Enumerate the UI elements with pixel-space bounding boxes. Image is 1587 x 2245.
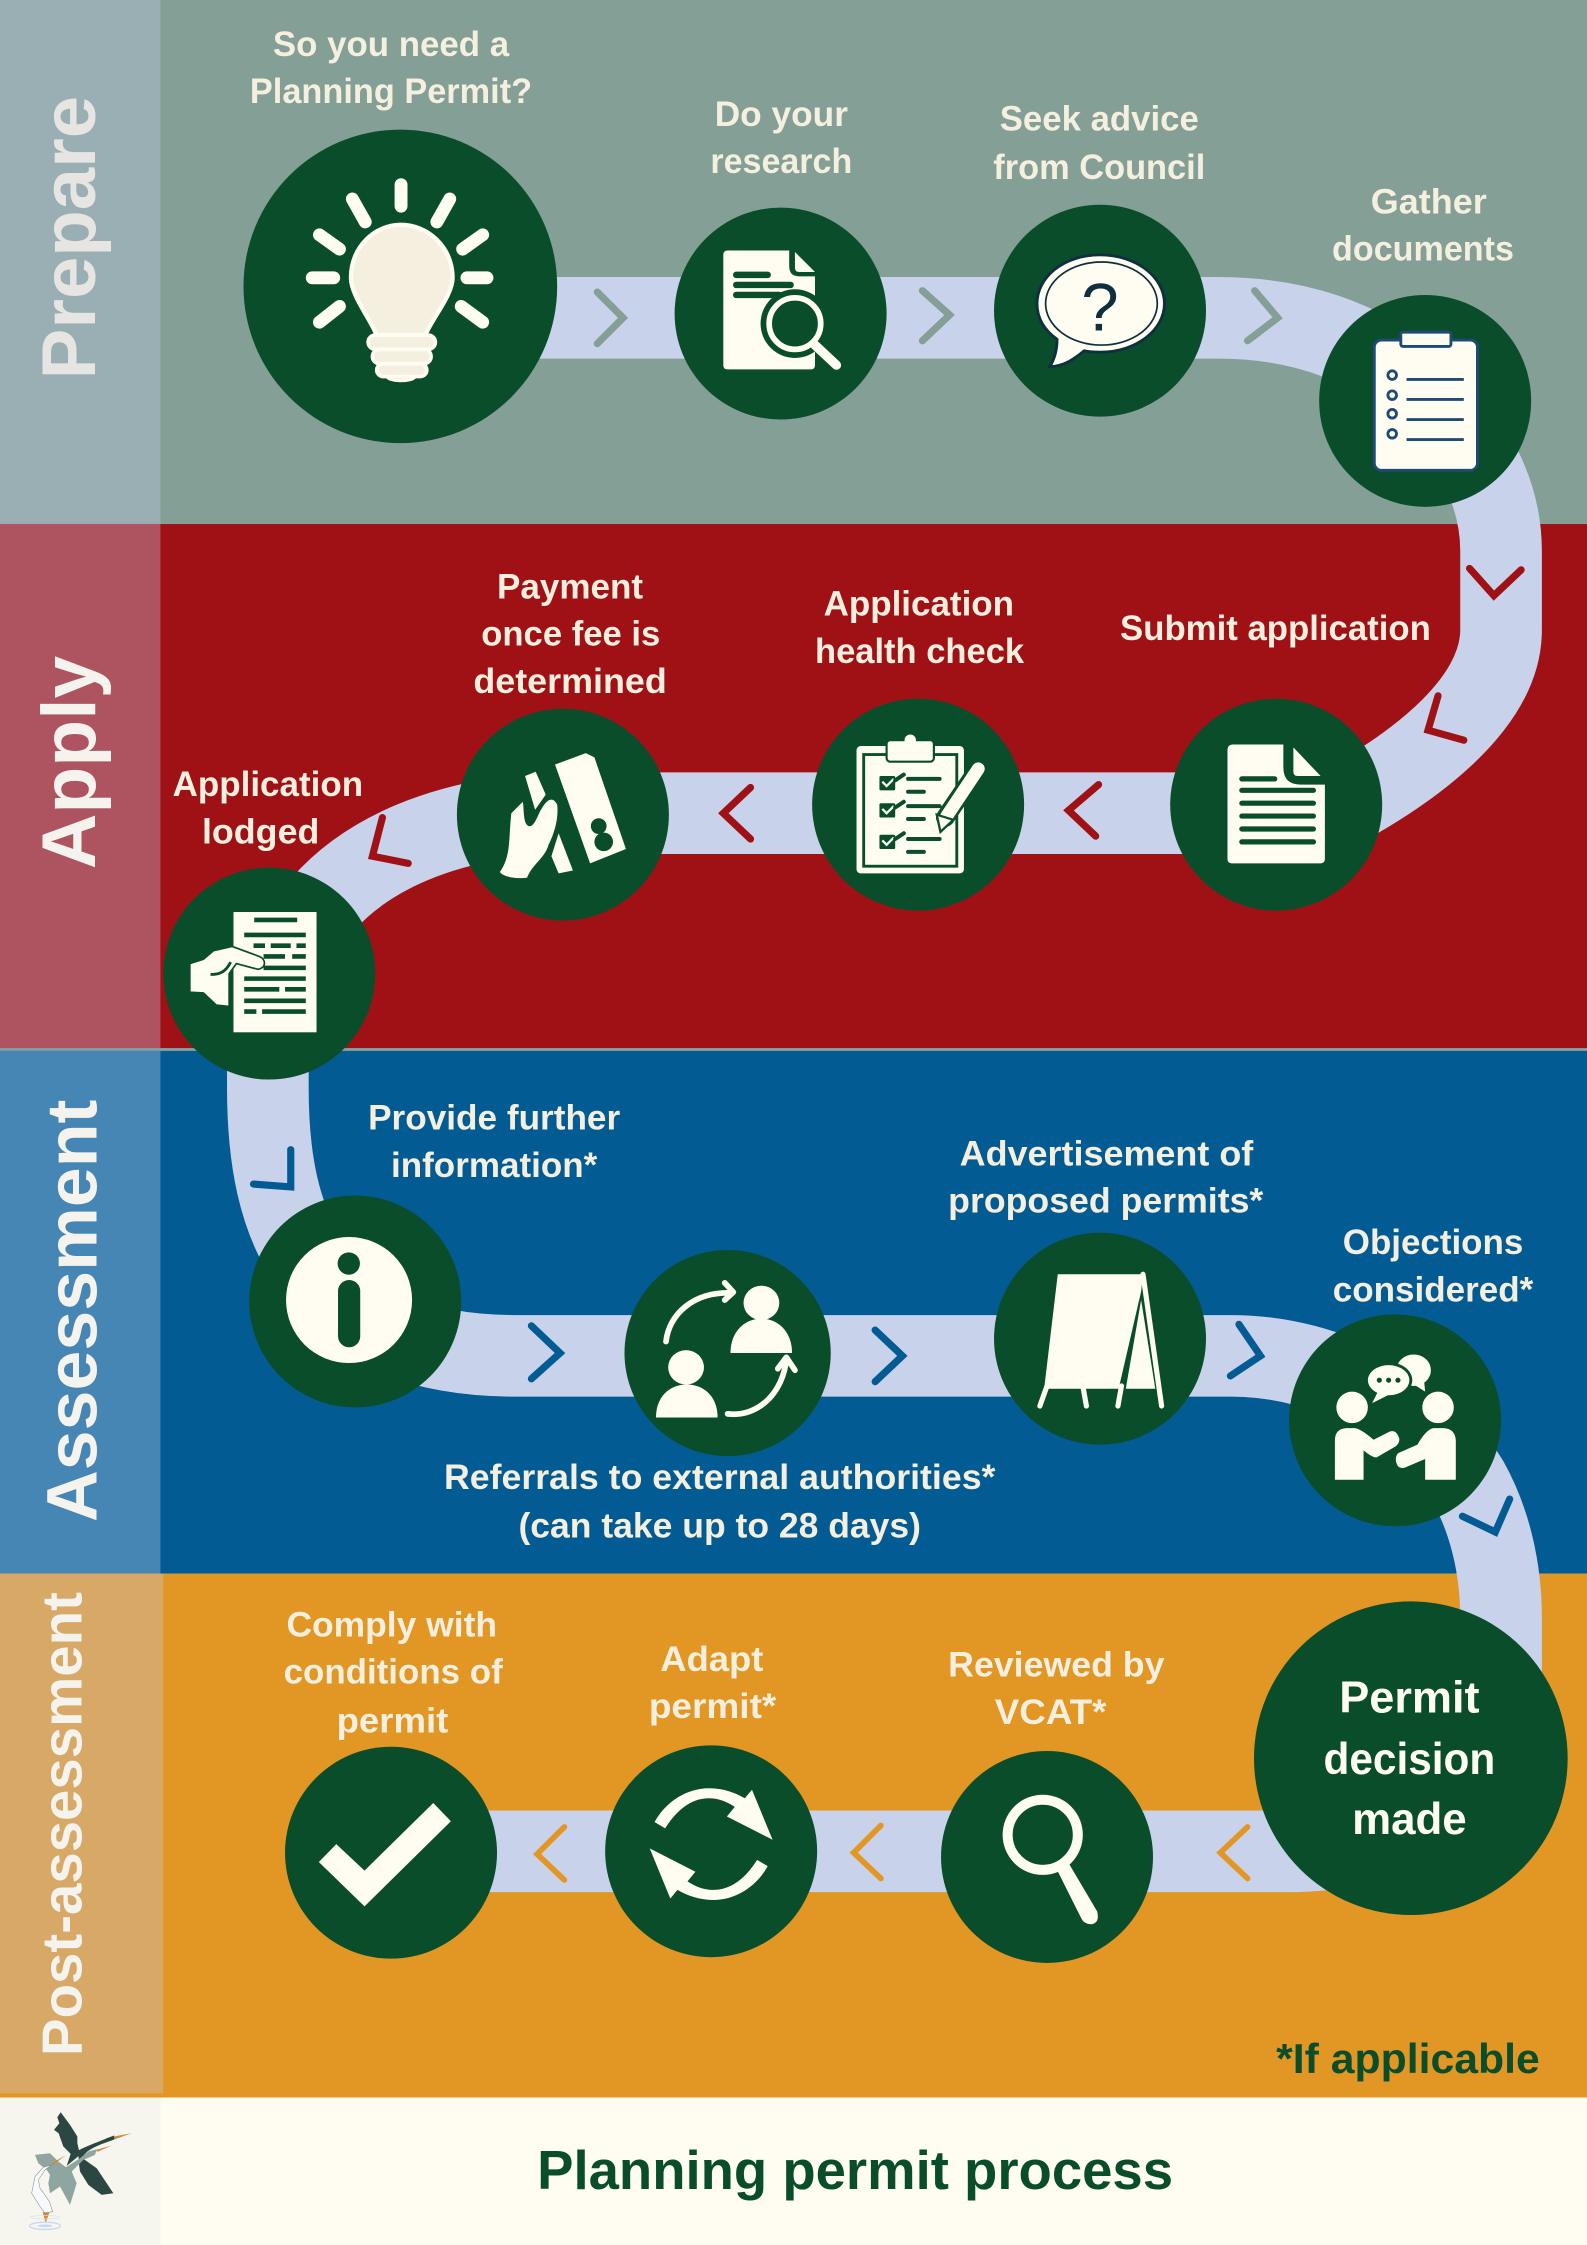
- panel: footer: [0, 2098, 1587, 2245]
- icon: refresh arrows: [650, 1788, 773, 1900]
- icon: speech bubble with question mark: [1037, 255, 1164, 367]
- step: Application lodged: [163, 765, 375, 1080]
- step: Referrals to external authorities: (can take up to 28 days): [518, 1507, 921, 1546]
- step: Objections considered: [1289, 1223, 1534, 1526]
- panel: post-assessment band: [0, 1574, 1587, 2098]
- icon: document with magnifier: [723, 251, 836, 369]
- step: Gather documents: documents: [1332, 230, 1514, 269]
- note: if applicable: *If applicable: [1276, 2035, 1540, 2082]
- heading: Prepare: Prepare: [27, 96, 112, 379]
- heading: Assessment: Assessment: [33, 1100, 113, 1522]
- step: Payment once fee is determined: Payment: [497, 567, 643, 606]
- step: Payment once fee is determined: determined: [473, 662, 667, 701]
- step: Referrals to external authorities: Referrals to external authorities*: [444, 1458, 996, 1497]
- step: Adapt permit: Adapt: [660, 1640, 764, 1679]
- step: Comply with conditions of permit: permit: [337, 1701, 449, 1740]
- step: Provide further information: Provide further: [368, 1099, 621, 1138]
- step: Adapt permit: permit*: [649, 1687, 777, 1726]
- icon: logo of three herons: [30, 2112, 132, 2230]
- step: Comply with conditions of permit: conditions of: [284, 1653, 503, 1692]
- step: Seek advice from Council: Seek advice: [1000, 99, 1199, 138]
- heading: Post-assessment: Post-assessment: [31, 1592, 94, 2056]
- step: Payment once fee is determined: once fee is: [481, 615, 660, 654]
- step: Permit decision made: decision: [1323, 1735, 1495, 1784]
- step: Gather documents: [1319, 182, 1531, 507]
- arrows: prepare chevrons: [597, 291, 1278, 344]
- icon: A-frame sign: [1040, 1274, 1162, 1406]
- step: Advertisement of proposed permits: proposed permits*: [948, 1182, 1264, 1221]
- step: Do your research: Do your: [715, 95, 848, 134]
- step: Application lodged: lodged: [202, 812, 319, 851]
- arrows: assessment chevrons: [254, 1150, 1510, 1532]
- step: Application lodged: Application: [173, 765, 363, 804]
- step: Seek advice from Council: from Council: [993, 148, 1205, 187]
- panel: assessment band: [0, 1048, 1587, 1574]
- heading: Apply: Apply: [27, 656, 112, 869]
- step: Referrals to external authorities: [444, 1250, 996, 1546]
- icon: light bulb: [312, 185, 487, 381]
- step: So you need a Planning Permit: [243, 25, 557, 443]
- icon: hand pointing at document: [190, 912, 317, 1032]
- step: Gather documents: Gather: [1371, 182, 1487, 221]
- step: Provide further information: information*: [391, 1146, 598, 1185]
- step: Advertisement of proposed permits: [948, 1134, 1264, 1445]
- step: Comply with conditions of permit: [284, 1606, 503, 1959]
- icon: information symbol: [286, 1237, 412, 1363]
- step: Permit decision made: made: [1352, 1795, 1467, 1844]
- icon: hand with payment card: [500, 753, 626, 878]
- path: winding route ribbon: [268, 318, 1501, 1851]
- step: Comply with conditions of permit: Comply with: [286, 1606, 497, 1645]
- step: Seek advice from Council: [993, 99, 1206, 417]
- step: Reviewed by VCAT: Reviewed by: [948, 1646, 1165, 1685]
- arrows: post-assessment chevrons: [537, 1825, 1248, 1880]
- step: Reviewed by VCAT: VCAT*: [995, 1693, 1107, 1732]
- step: Payment once fee is determined: [457, 567, 669, 921]
- title: Planning permit process: [537, 2140, 1173, 2201]
- step: Submit application: [1120, 609, 1431, 911]
- icon: clipboard list: [1374, 332, 1477, 470]
- step: Do your research: [675, 95, 887, 420]
- step: So you need a Planning Permit: Planning Permit?: [250, 72, 532, 111]
- icon: document: [1227, 745, 1325, 863]
- step: Reviewed by VCAT: [941, 1646, 1165, 1963]
- icon: speech bubble with question mark: ?: [1081, 271, 1119, 346]
- step: Advertisement of proposed permits: Advertisement of: [960, 1134, 1254, 1173]
- panel: apply band: [0, 524, 1587, 1049]
- icon: two people exchanging arrows: [656, 1283, 795, 1417]
- step: Adapt permit: [605, 1640, 817, 1957]
- step: Application health check: Application: [824, 585, 1014, 624]
- icon: magnifying glass: [1008, 1800, 1098, 1924]
- step: Application health check: health check: [815, 632, 1025, 671]
- step: Application health check: [812, 585, 1025, 911]
- step: Objections considered: considered*: [1333, 1270, 1534, 1309]
- step: Permit decision made: Permit: [1339, 1673, 1480, 1722]
- icon: checklist clipboard with pen: [857, 734, 978, 873]
- panel: prepare band: [0, 0, 1587, 524]
- icon: check mark: [319, 1803, 451, 1906]
- step: Permit decision made: [1254, 1601, 1568, 1915]
- step: Submit application: Submit application: [1120, 609, 1431, 648]
- step: Objections considered: Objections: [1343, 1223, 1523, 1262]
- step: Provide further information: [249, 1099, 621, 1407]
- step: Do your research: research: [710, 142, 852, 181]
- step: So you need a Planning Permit: So you need a: [273, 25, 510, 64]
- arrows: apply chevrons: [372, 568, 1521, 863]
- icon: two people talking: [1335, 1354, 1456, 1480]
